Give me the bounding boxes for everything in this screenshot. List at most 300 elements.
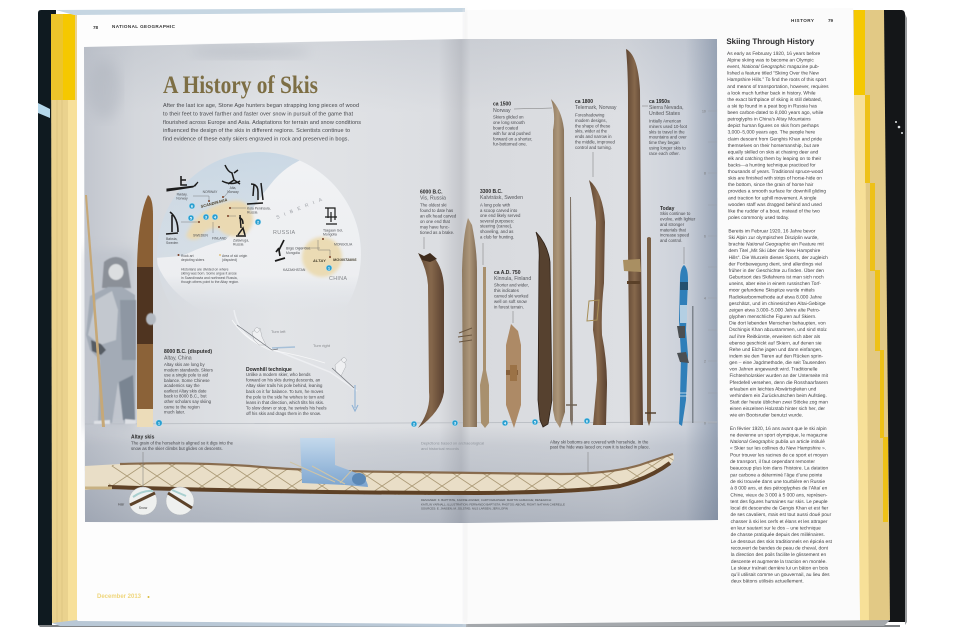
panel: infographic background [84, 39, 718, 523]
skier: turn right [332, 358, 354, 388]
article text: French: la direction des poils facilite le glissement en [731, 552, 826, 558]
diagram: turning skiers [232, 310, 357, 391]
article text: German: Die dort lebenden Menschen behaupten, von [729, 321, 826, 327]
article text: German: verhindern ein Zurückrutschen beim Aufstieg. [730, 393, 827, 399]
left page [52, 8, 466, 627]
article text: French: chasser à ski les cerfs et élans et les attraper [731, 519, 828, 525]
text: downhill technique: off his skis and drags them in the snow. [246, 411, 321, 416]
article text: English: elk and catching them by leaping on to their [728, 156, 822, 162]
text: Today: and stronger [660, 222, 685, 227]
map labels: Tsagaan Gol, [323, 228, 343, 232]
map number markers: 2 [257, 220, 260, 224]
text: ca 1950s: mountains and over [649, 135, 687, 140]
article text: English: lished a feature titled “Skiing Over the New [727, 71, 819, 77]
article text: English: petroglyphs in China’s Altay Mountains [727, 117, 811, 123]
footer: December 2013: December 2013 [97, 594, 142, 600]
diagram: turning skiers: Turn right [313, 343, 331, 348]
map labels: FINLAND [212, 236, 227, 240]
article text: German: Hills“. Die Wurzeln dieses Sports, der zugleich [729, 255, 828, 261]
petroglyph: Tsagaan Gol [325, 208, 337, 224]
text: 3300 BC: a club for hunting. [480, 234, 514, 239]
text: Today: Skis continue to [660, 211, 691, 216]
text: 3300 BC: A long pole with [480, 202, 511, 208]
map note: in Scandinavia and northwest Russia, [181, 276, 238, 280]
text: depictions note: Depictions based on archaeological [421, 440, 484, 446]
article text: French: Pour trouver les racines de ce sport et moyen [730, 452, 828, 458]
map labels: Alta, [230, 186, 236, 190]
map number markers [188, 203, 332, 271]
article text: German: brachte National Geographic ein Feature mit [728, 243, 824, 248]
horsehide edge [108, 463, 670, 493]
article text: English: a look much further back in history. While [727, 90, 816, 96]
ski detail circles: Hair [118, 502, 125, 506]
map labels: Russia [233, 242, 243, 246]
diagram: turning skiers: Turn left [271, 329, 286, 334]
marker 1: 1 [158, 420, 161, 426]
article text: French: National Geographic publia un article intitulé [730, 440, 825, 445]
right page [463, 8, 890, 627]
text: 6000 BC: on one end that [420, 219, 451, 224]
text: ca 1800: modern designs, [575, 118, 607, 123]
region names: RUSSIA [273, 230, 295, 236]
globe base [157, 152, 361, 356]
text: Altay skis: The grain of the horsehair is aligned so it digs into the [131, 440, 234, 446]
map labels: Rødøy, [177, 192, 187, 196]
article text: German: wie ein Bootsruder benutzt wurde. [730, 413, 803, 419]
credits: SOURCES: E. JANSEN; M. JOLSTAD; NILS LARSEN; JERI LOFIN [421, 506, 508, 510]
article text: German: dem Titel „Mit Ski über die New Hampshire [728, 248, 821, 254]
text: 8000 BC: earliest Altay skis date [164, 388, 207, 394]
map labels: Mongolia [286, 251, 300, 255]
article text: English: 3,000–5,000 years ago. The people here [728, 130, 815, 136]
text: ca AD 750: ca A.D. 750 [494, 270, 521, 276]
text: 3300 BC: shoveling, and as [480, 229, 513, 234]
map note: skiing was born. Some argue it arose [181, 272, 237, 276]
text: 6000 BC: found to date has [420, 208, 453, 213]
text: Altay ski bottoms: past the hide was laced on; now it is tacked in place. [550, 444, 650, 450]
map number markers: 4 [214, 214, 217, 220]
lattice of cords [108, 454, 674, 495]
text: 8000 BC: much later. [164, 410, 185, 415]
map legend: Area of ski origin [222, 254, 247, 258]
text: downhill technique [246, 367, 326, 416]
book cover: right [883, 10, 907, 625]
article text: French: Le skieur traînait derrière lui un bâton en bois [731, 565, 829, 571]
text: ca 1500: ca 1500 [493, 102, 511, 108]
article text: German: uneins, aber eine in einem russischen Torf- [729, 281, 821, 287]
text: ca 1500: forward on a shorter, [493, 136, 532, 141]
header: right page: HISTORY [791, 18, 814, 23]
text: 6000 BC: tioned as a brake. [420, 230, 454, 235]
text: 8000 BC: academics say the [164, 383, 200, 388]
text: downhill technique: To slow down or stop, he swivels his heels [246, 406, 326, 411]
article text: French: recouvert de bandes de peau de cheval, dont [731, 546, 829, 551]
article text: English: the bottom, since the grain of horse hair [728, 182, 814, 188]
credits: DESIGNER: K. BAPTISTE, KARINE AIGNER, CARTOGRAPHER: MARTIN GAMACHE; RESEARCH: [421, 498, 552, 502]
ski: Sierra Nevada with pole [623, 49, 656, 426]
article text: German: Bereits im Februar 1920, 16 Jahre bevor [728, 229, 816, 234]
text: ca 1800: ends and narrow in [575, 134, 612, 139]
article text: French: En février 1920, 16 ans avant que le ski alpin [730, 426, 827, 432]
article text: French: à 8 000 ans, et des pétroglyphes de l’Altaï en [730, 486, 828, 492]
text: 8000 BC: use a single pole to aid [164, 373, 209, 378]
credits [421, 498, 565, 510]
map legend [178, 254, 247, 262]
height scale [702, 110, 717, 426]
text: Altay skis: Altay skis [131, 434, 155, 440]
text: downhill technique: Altay skier trails his pole behind, leaning [246, 383, 323, 388]
article text: English: poles commonly used today. [728, 215, 789, 221]
text: ca AD 750: Shorter and wider, [494, 282, 529, 288]
article text: German: Ski Alpin zur olympischen Disziplin wurde, [728, 235, 819, 241]
region names: ALTAY [312, 259, 326, 263]
region names [200, 195, 357, 282]
text: Altay skis: snow as the skier climbs but glides on descents. [131, 446, 223, 451]
text: Today: Today [660, 206, 675, 212]
article text: English: like the rudder of a boat, instead of the two [728, 208, 820, 214]
text: 3300 BC: 3300 B.C. [480, 189, 503, 195]
left page edges [51, 14, 77, 623]
text: ca AD 750: Kinnula, Finland [494, 276, 531, 282]
intro text: influenced the design of the skis in different regions. Scientists continue to [163, 128, 350, 134]
article text: English: the exact birthplace of skiing is still debated, [727, 97, 822, 103]
article text: German: Statt der heute üblichen zwei Stöcke zog man [730, 400, 828, 406]
ski 2: Vis [418, 253, 444, 428]
article text: French: de chasse pratiquée depuis des millénaires. [731, 532, 825, 538]
markers 2 to 6: 4 [504, 420, 507, 426]
text: ca 1950s: Sierra Nevada, [649, 105, 684, 111]
article column [726, 37, 834, 585]
article text: French: descente et augmente la traction en montée. [731, 559, 827, 565]
height scale: 8 [704, 172, 706, 176]
map labels: Norway [176, 196, 188, 200]
ski: Today [677, 265, 694, 426]
text: ca 1950s: miners used 10-foot [649, 124, 688, 129]
text: ca AD 750 [494, 270, 531, 310]
map labels: Mongolia [323, 232, 337, 236]
markers 2 to 6: 3 [454, 420, 457, 426]
text: ca AD 750: in forest terrain. [494, 304, 524, 310]
article text: French: Chine, vieux de 3 000 à 5 000 ans, représen- [730, 492, 828, 498]
text: Altay ski bottoms [550, 440, 650, 450]
text: 8000 BC: other scholars say skiing [164, 399, 212, 404]
article text: French: de ski trouvée dans une tourbière en Russie [730, 479, 825, 485]
header: left page [93, 24, 176, 30]
text: downhill technique: leans in that direction, which tilts his skis. [246, 400, 324, 405]
text: ca 1800: control and turning. [575, 145, 612, 150]
article text: German: moor gefundene Skispitze wurde mittels [729, 288, 815, 294]
text: Today: increase speed [660, 233, 690, 238]
text: 8000 BC: Altay skis are long by [164, 362, 205, 367]
article text: French: local dit descendre de Gengis Khan et est fier [730, 506, 829, 512]
text: ca 1500: fur-bottomed one. [493, 142, 527, 147]
article text: German: auf ihre Reitkünste, erweisen sich aber als [729, 334, 821, 340]
article text: French: deux bâtons utilisés actuellement. [731, 579, 804, 585]
article text: German: zeigen etwa 3.000–5.000 Jahre alte Petro- [729, 307, 821, 313]
text: 6000 BC: an elk head carved [420, 214, 457, 218]
text: 8000 BC: came to the region [164, 404, 200, 409]
text: downhill technique: Downhill technique [246, 367, 292, 373]
leader lines [424, 106, 684, 323]
text: 3300 BC: steering (canoe), [480, 224, 512, 229]
ski boot [290, 438, 368, 487]
text: 6000 BC: Vis, Russia [420, 196, 446, 202]
text: ca AD 750: well on soft snow [494, 299, 528, 304]
height scale: 10 [702, 110, 706, 114]
article text: German: von Jahren angewandt wird. Traditionelle [729, 367, 818, 373]
skier's hand [146, 313, 156, 325]
article text: English: skis are finished with strips of horse-hide on [728, 176, 822, 182]
text: 3300 BC: a scoop carved into [480, 208, 518, 213]
text: 6000 BC [420, 190, 457, 235]
article text: English: event, National Geographic magazine pub- [727, 65, 819, 70]
map labels: NORWAY [203, 190, 218, 194]
globe map [157, 152, 361, 294]
map legend: depicting skiers [181, 258, 205, 262]
text: Today: and control. [660, 238, 682, 243]
article text: French: en leur sautant sur le dos – une technique [731, 526, 821, 532]
text: ca 1500: Norway [493, 108, 511, 114]
map rock-art dots [198, 196, 331, 258]
text: 8000 BC [164, 349, 213, 415]
text: depictions note: and historical records [421, 446, 459, 451]
article text: English: wooden staff was dragged behind and used [728, 202, 822, 208]
petroglyph: Boksta [166, 212, 178, 234]
text: downhill technique: forward on his skis during descents, an [246, 378, 321, 383]
floor line [85, 422, 717, 424]
article text: English: claim descent from Genghis Khan and pride [728, 136, 822, 142]
ski 5 pair and pole: Norway [536, 99, 577, 428]
article text: French: « Skier sur les collines du New Hampshire ». [730, 446, 826, 452]
article text: English: and traction for uphill movement. A single [728, 195, 817, 201]
ski 3 with pole: Kalvtrask [458, 218, 489, 428]
article text: English: been carbon-dated to 8,000 years ago, while [727, 110, 824, 116]
article text: English: Alpine skiing was to become an Olympic [727, 58, 814, 64]
map labels: Norway [227, 190, 239, 194]
text: 8000 BC: balance. Some Chinese [164, 378, 210, 383]
region names: SCANDINAVIA [200, 197, 228, 209]
text: ca 1500 [493, 102, 532, 147]
text: ca 1800 [575, 99, 617, 150]
intro text: find evidence of these early skiers engraved in rock and preserved in bogs. [163, 136, 349, 142]
map labels: Zalavruga, [233, 238, 249, 242]
height scale: 0 [704, 422, 706, 426]
text: 6000 BC: 6000 B.C. [420, 190, 443, 196]
article text: German: Geburtsort des Skifahrens ist man sich noch [729, 275, 824, 281]
text: downhill technique: Unlike a modern skier, who bends [246, 372, 310, 377]
text: downhill technique: back on it for balance. To turn, he moves [246, 389, 323, 394]
petroglyph: Rodoy [167, 176, 198, 191]
land masses [157, 160, 361, 292]
text: Altay skis [131, 434, 234, 451]
article text: English: a ski tip found in a peat bog in Russia has [727, 103, 818, 109]
map labels: KAZAKHSTAN [283, 268, 306, 272]
skier: turn left [237, 325, 278, 350]
header: left page: NATIONAL GEOGRAPHIC [112, 24, 176, 29]
article text: English: thousands of years. Traditional spruce-wood [728, 169, 823, 175]
map labels: Russia [247, 210, 257, 214]
map number markers: 6 [191, 204, 194, 208]
markers 2 to 6: 2 [413, 422, 416, 426]
map legend: (disputed) [222, 258, 237, 262]
map labels: Bøksta, [166, 237, 178, 241]
intro text: After the last ice age, Stone Age hunters began strapping long pieces of wood [163, 103, 359, 109]
article text: German: ebenso geschickt auf Skiern, auf denen sie [729, 340, 822, 346]
ski 1: Altay [137, 195, 153, 427]
article text: French: ne devienne un sport olympique, le magazine [730, 432, 828, 438]
markers 2 to 6 [411, 418, 590, 427]
article text: French: tent des figures humaines sur skis. Le peuple [730, 499, 828, 505]
text: 6000 BC: may have func- [420, 224, 450, 230]
article text: English: and means of transportation, however, requires [727, 84, 829, 90]
map labels: Sweden [166, 241, 178, 245]
article text: French: de ses cavaliers, mais est tout aussi doué pour [730, 512, 832, 518]
ski pole held by skier [85, 195, 105, 427]
big horizontal ski [85, 454, 674, 495]
petroglyph: Bilgis Oigor Gol [275, 240, 285, 261]
article text: English: backs—a hunting technique practiced for [728, 163, 816, 169]
map number markers: 1 [328, 266, 331, 270]
text: 3300 BC: several purposes: [480, 218, 514, 223]
map note [181, 268, 239, 284]
article heading: Skiing Through History [726, 37, 815, 46]
petroglyph: Alta [222, 165, 240, 184]
photo: skier in furs [86, 250, 136, 430]
map labels [166, 186, 353, 272]
text: 8000 BC: back to 8000 B.C., but [164, 394, 207, 399]
text: 8000 BC: modern standards. Skiers [164, 367, 213, 372]
article text: German: früher in der Geschichte zu finden. Über den [729, 267, 824, 274]
text: ca 1950s: Initially American [649, 118, 682, 124]
article text: German: gen – eine Jagdmethode, die seit Tausenden [729, 360, 826, 366]
text: ca 1950s: United States [649, 111, 681, 117]
map labels: MONGOLIA [334, 242, 353, 246]
text: 3300 BC: Kalvträsk, Sweden [480, 195, 523, 201]
article text: German: Fichtenholzskier wurden an der Unterseite mit [729, 373, 829, 379]
ski base [85, 454, 674, 495]
right page edges and colored tabs [853, 10, 890, 622]
marker 1 [156, 420, 162, 426]
credits: KAITLIN YARNALL; ILLUSTRATION: FERNANDO BAPTISTA; PHOTOS: ABOVE, RIGHT: NATHAN CHERELLE [421, 502, 565, 506]
article text: German: geschätzt, und im chinesischen Altai-Gebirge [729, 301, 826, 307]
petroglyph: Zalavruga [236, 215, 246, 236]
height scale: 4 [704, 296, 706, 300]
height scale: 6 [704, 234, 706, 238]
article text: English: Hampshire Hills.” To find the roots of this sport [727, 77, 827, 83]
article text: German: einen einzelnen Holzstab hinter sich her, der [730, 406, 825, 412]
article text: German: Rehe und Elche jagen und dann einfangen, [729, 347, 822, 353]
article text: German: erlauben ein leichtes Abwärtsgleiten und [730, 386, 817, 392]
article text: English: equally skilled on skis at chasing deer and [728, 149, 819, 155]
article text: French: Le dessous des skis traditionnels en épicéa est [731, 539, 833, 545]
text: Today [660, 206, 696, 243]
article text: French: par carbone a déterminé l’âge d’une pointe [730, 472, 823, 478]
ski 4: Kinnula [506, 324, 521, 428]
text: ca 1800: Foreshadowing [575, 112, 605, 118]
map labels: SWEDEN [193, 234, 208, 238]
text: ca AD 750: carved ski worked [494, 294, 529, 298]
article text: German: der Fortbewegung dient, sind allerdings viel [729, 261, 822, 267]
text: ca 1500: Skiers glided on [493, 114, 524, 120]
map labels: Bilgis Oigor Gol, [286, 246, 311, 250]
ski detail circles: Snow [139, 506, 148, 510]
article text: English: themselves on their horsemanship, but are [728, 143, 820, 149]
article text: English: depict human figures on skis from perhaps [728, 123, 819, 129]
markers 2 to 6: 6 [586, 418, 589, 424]
text: ca 1950s: skis to travel in the [649, 129, 685, 134]
text: ca 1800: ca 1800 [575, 99, 593, 105]
map legend: Rock art [181, 254, 194, 258]
intro text [163, 103, 361, 142]
ski detail circles [118, 487, 194, 515]
ski 6: Telemark [587, 180, 607, 425]
text: ca AD 750: this indicates [494, 288, 519, 293]
markers 2 to 6: 5 [534, 420, 537, 424]
header: left page: 78 [93, 25, 99, 30]
article text: German: indem sie den Tieren auf den Rücken sprin- [729, 354, 823, 360]
text: Today: evolve, with lighter [660, 216, 696, 222]
article text: French: qu’il utilisait comme un gouvernail, au lieu des [731, 572, 830, 578]
map labels: Kola Peninsula, [247, 206, 271, 210]
leaders to big ski [143, 452, 588, 487]
article text: German: glyphen menschliche Figuren auf Skiern. [729, 314, 817, 320]
text: ca 1500: with fur and pushed [493, 131, 531, 136]
height scale: 2 [704, 360, 706, 364]
text: ca 1950s: time they began [649, 140, 680, 145]
text: depictions note [421, 440, 484, 451]
map number markers: 5 [190, 216, 193, 220]
text: 8000 BC: 8000 B.C. (disputed) [164, 349, 212, 355]
article text: German: Dschingis Khan abzustammen, und sind stolz [729, 327, 827, 333]
article text: French: beaucoup plus loin dans l’histoire. La datation [730, 466, 829, 472]
text: 3300 BC [480, 189, 523, 239]
region names: SIBERIA [276, 195, 328, 221]
map leader lines [181, 190, 330, 258]
text: ca 1800: skis, wider at the [575, 129, 608, 134]
text: ca 1800: Telemark, Norway [575, 105, 617, 111]
header: right page: 79 [828, 18, 834, 23]
text: ca 1800: the middle, improved [575, 139, 615, 144]
text: ca 1800: the shape of these [575, 123, 611, 128]
text: ca 1950s: ca 1950s [649, 99, 670, 105]
map note: Historians are divided on where [181, 268, 229, 272]
text: Altay ski bottoms: Altay ski bottoms are covered with horsehide. In the [550, 440, 649, 444]
text: ca 1500: one long smooth [493, 120, 525, 125]
text: 8000 BC: Altay, China [164, 356, 192, 362]
text: downhill technique: the pole to the side he wishes to turn and [246, 394, 325, 399]
article text: German: Pferdefell versehen, denn die Rosshaarfasern [729, 380, 828, 386]
intro text: to their feet to travel farther and faster over snow in pursuit of the game that [163, 112, 353, 118]
text: Today: materials that [660, 227, 687, 232]
region names: MOUNTAINS [333, 258, 357, 262]
text: 3300 BC: one end likely served [480, 213, 521, 218]
text: ca 1950s: race each other. [649, 151, 680, 156]
article text: French: de transport, il faut cependant remonter [730, 459, 815, 465]
map note: though others point to the Altay region. [181, 280, 239, 284]
article text: English: provides a smooth surface for downhill gliding [728, 189, 826, 195]
header: right page [791, 18, 834, 23]
text: ca 1950s: using longer skis to [649, 145, 686, 150]
text: ca 1500: board coated [493, 126, 519, 130]
text: ca 1950s [649, 99, 688, 156]
article text: German: Radiokarbonmethode auf etwa 8.000 Jahre [729, 294, 822, 300]
arrow: blue down [352, 385, 358, 411]
map number markers: 3 [205, 214, 208, 220]
region names: CHINA [329, 276, 347, 282]
intro text: flourished across Europe and Asia. Adaptations for terrain and snow conditions [163, 120, 361, 126]
article text: English: As early as February 1920, 16 years before [727, 51, 820, 57]
title: A History of Skis [163, 72, 318, 99]
